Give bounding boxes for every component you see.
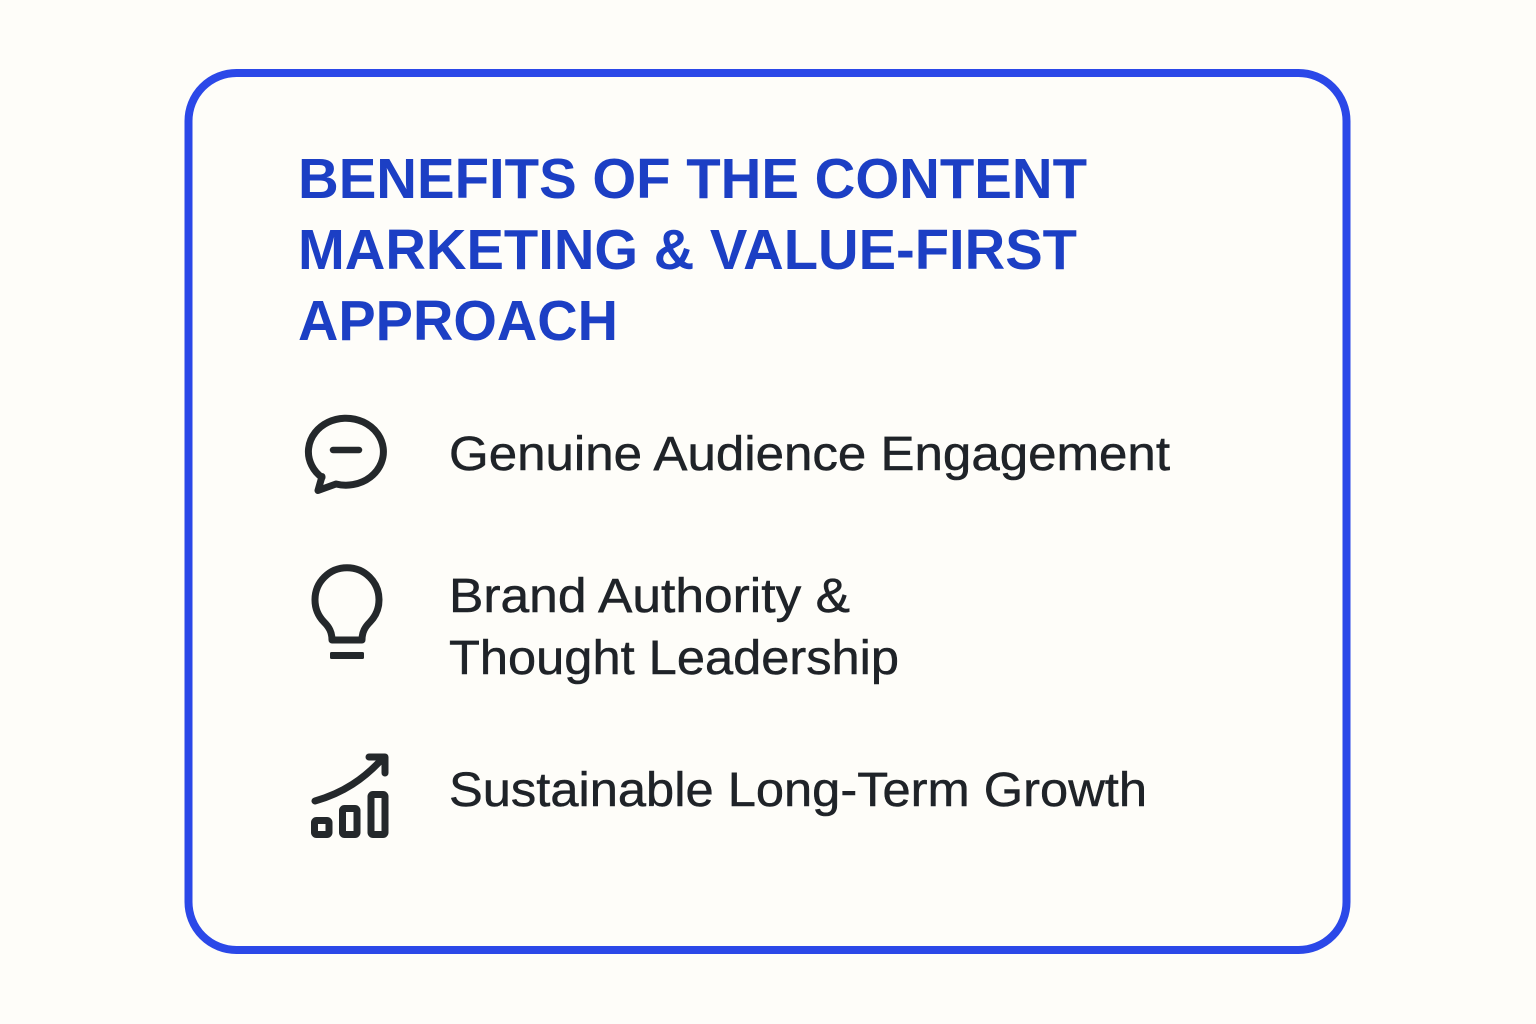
text: brand authority and thought leadership: Brand Authority & [449,570,850,623]
panel: benefits card [188,73,1346,950]
heading: MARKETING & VALUE-FIRST [298,218,1077,282]
icon: growth chart [314,757,385,834]
text: sustainable long-term growth: Sustainable Long-Term Growth [449,764,1147,817]
heading [298,147,1087,353]
heading: BENEFITS OF THE CONTENT [298,147,1087,211]
text: brand authority and thought leadership [449,570,899,685]
heading: APPROACH [298,289,618,353]
icon: light bulb [315,568,379,659]
text: brand authority and thought leadership: Thought Leadership [449,632,899,685]
text: genuine audience engagement: Genuine Audience Engagement [449,428,1170,481]
icon: speech bubble [308,418,383,490]
